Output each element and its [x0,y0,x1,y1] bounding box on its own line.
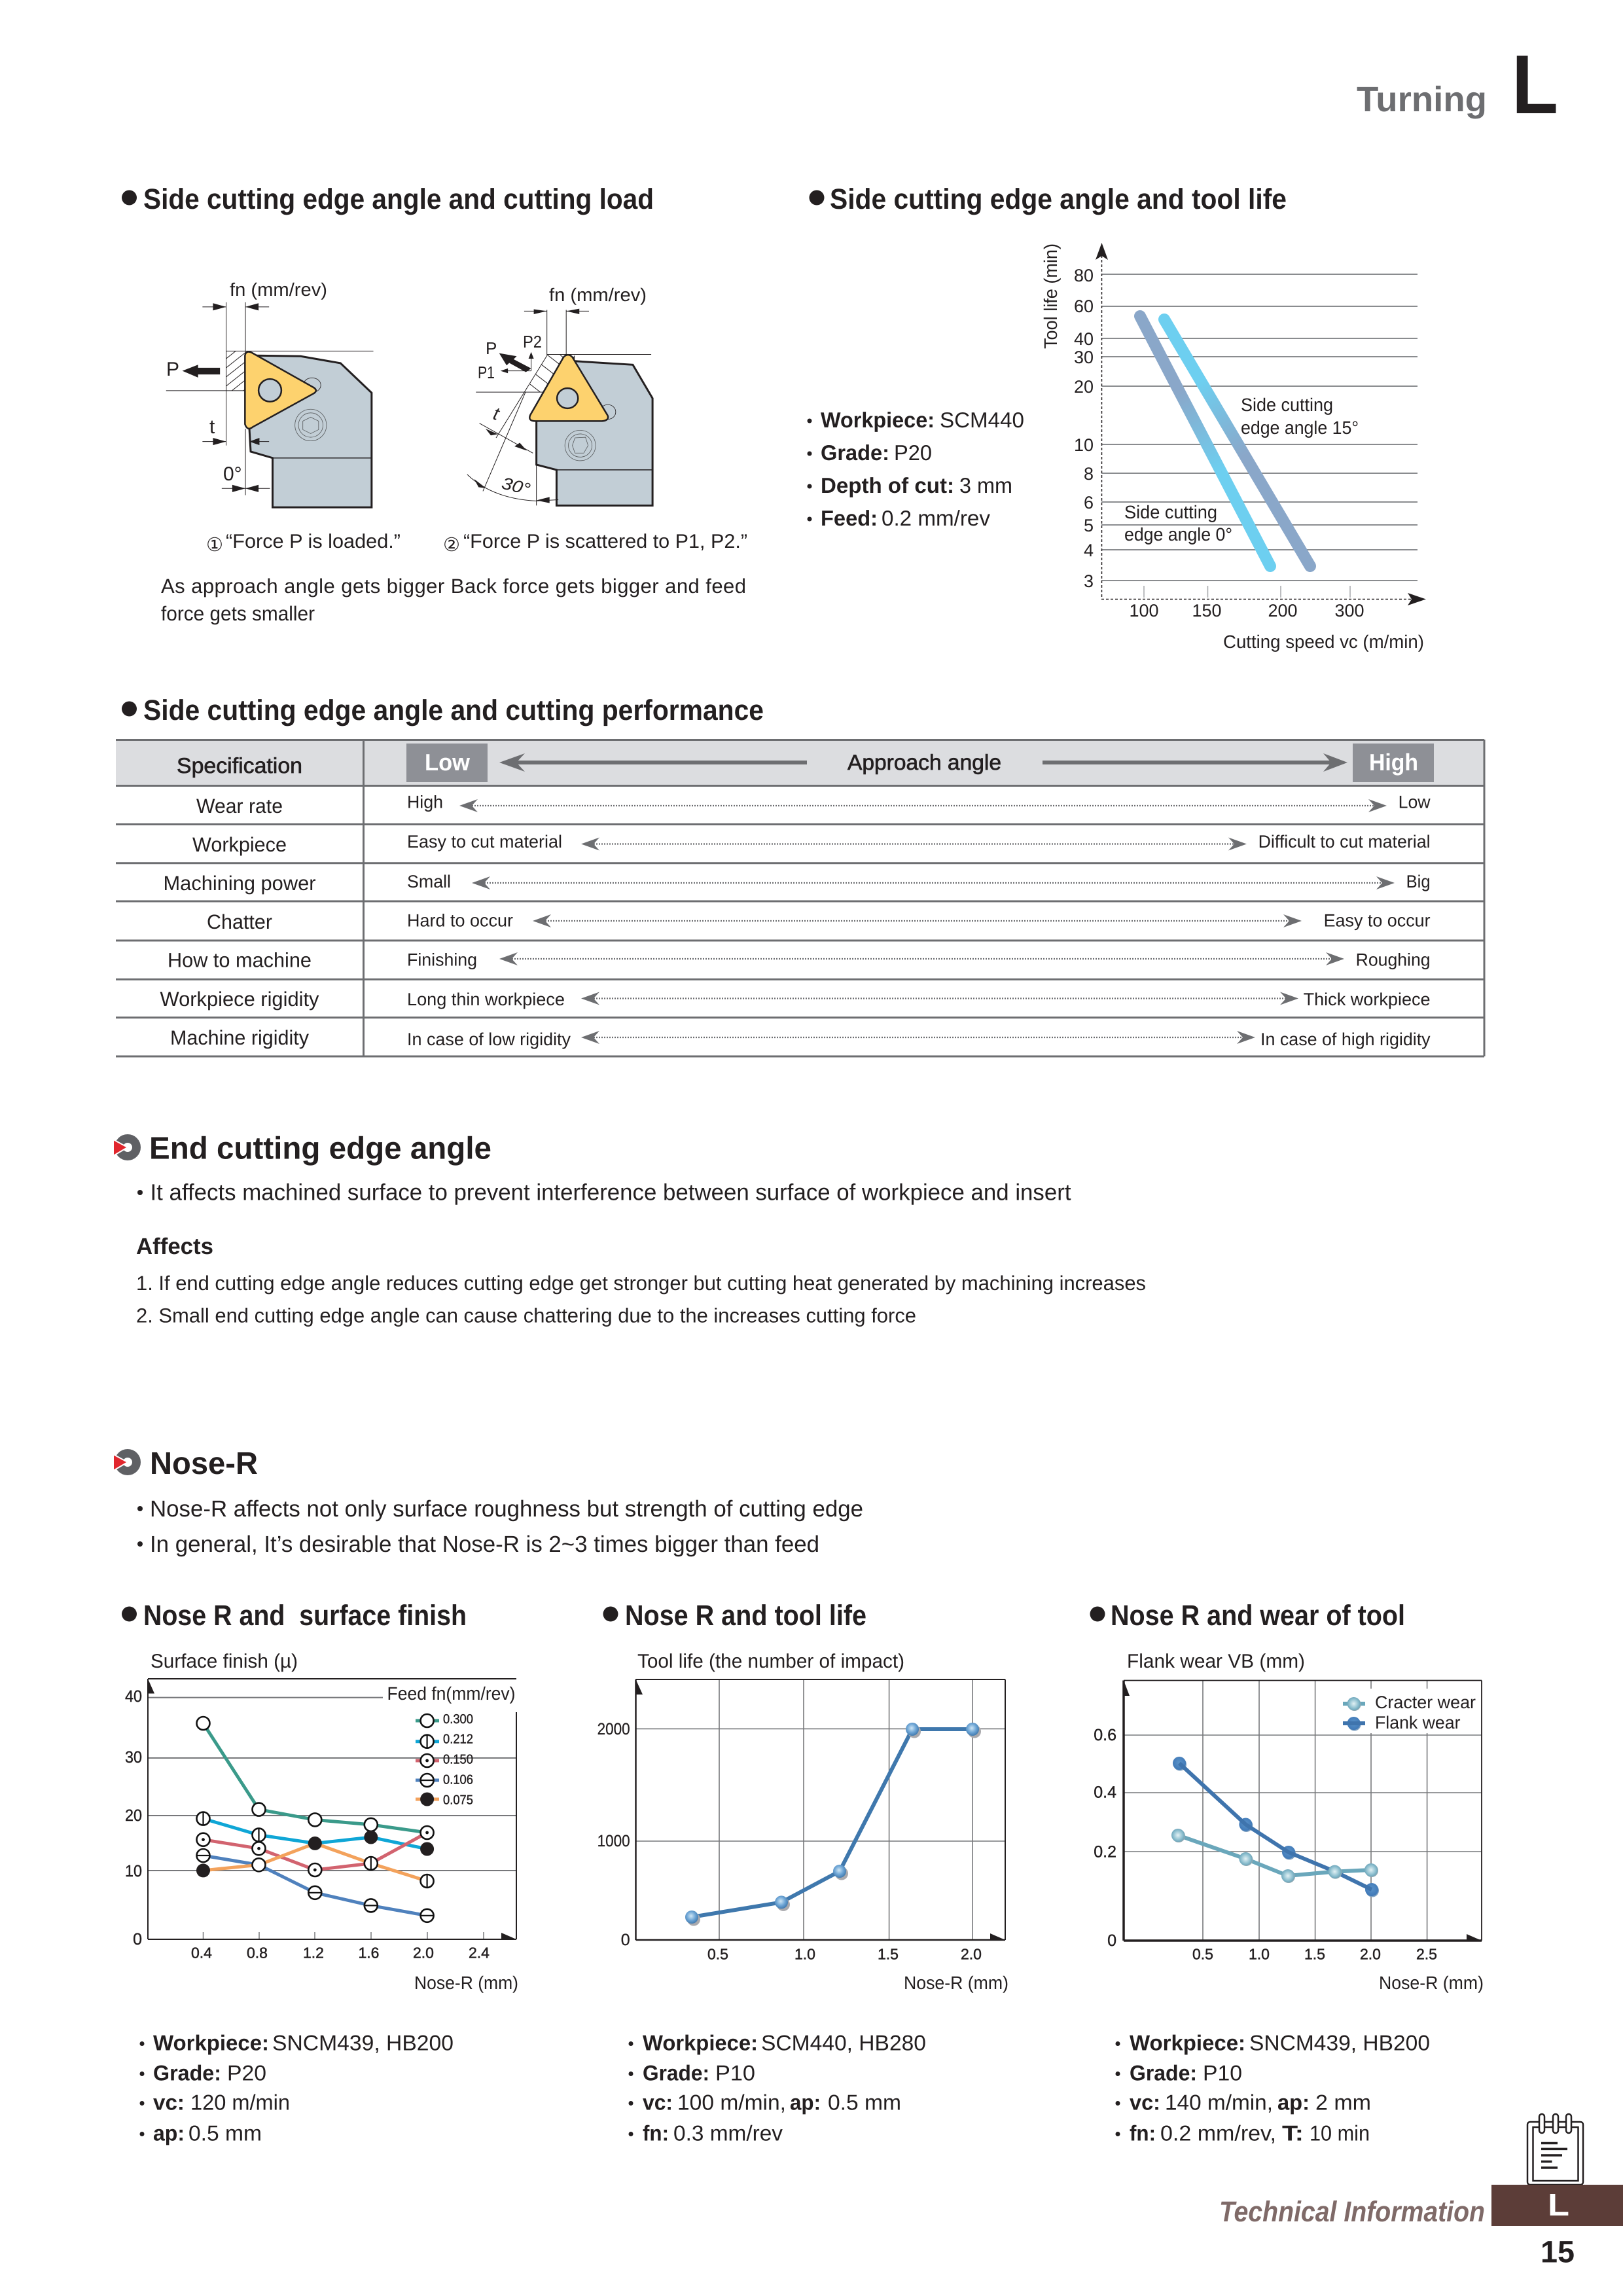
chart: tool life vs cutting speed [1041,243,1426,652]
conditions list: ap: [1277,2090,1310,2114]
label: P2: P2 [523,332,542,351]
label: P left: P [166,359,179,380]
header: low badge: Low [425,749,471,776]
y axis labels: 20 [125,1806,142,1825]
y axis labels: 40 [125,1687,142,1706]
text block: approach angle note: force gets smaller [161,602,315,625]
x axis labels: 0.5 [1192,1946,1213,1963]
conditions list: T: [1282,2121,1304,2145]
y axis labels: 0.2 [1094,1843,1116,1861]
conditions list: fn: [643,2121,669,2145]
conditions list: vc: [1130,2090,1160,2114]
y axis tick labels: 10 [1074,435,1094,455]
heading: Nose R and wear of tool [1111,1600,1405,1632]
x axis labels: 1.2 [303,1944,324,1961]
y axis tick labels: 6 [1084,493,1094,512]
label: t right: t [491,403,502,424]
y axis labels: 0 [621,1931,630,1949]
axis title: Tool life (the number of impact) [637,1651,904,1672]
y axis labels: 0.6 [1094,1726,1116,1744]
bullet text: In general, It’s desirable that Nose-R is 2~3 times bigger than feed [150,1532,819,1557]
row: machine rigidity: Machine rigidity [170,1026,309,1049]
conditions list: P10 [1203,2060,1242,2085]
conditions list: Workpiece: [153,2030,269,2055]
conditions list: ap: [790,2090,821,2114]
section tab [1491,2185,1623,2226]
x axis labels: 0.4 [191,1944,212,1961]
x axis tick labels [1129,601,1364,620]
conditions list [1115,2030,1430,2145]
label: fn (mm/rev) left: fn (mm/rev) [230,279,327,300]
y axis tick labels: 4 [1084,541,1094,560]
row: workpiece [192,832,1431,856]
y axis labels: 0.4 [1094,1783,1116,1801]
caption: force P is loaded: ① [206,535,223,556]
row: machine rigidity: In case of high rigidity [1260,1030,1431,1049]
conditions list: Depth of cut: [821,473,954,497]
row: workpiece rigidity: Workpiece rigidity [160,988,319,1011]
legend: Cracter wear [1375,1693,1476,1712]
conditions list: Grade: [643,2060,709,2085]
conditions list: 0.5 mm [188,2121,262,2145]
y axis labels: 30 [125,1748,142,1767]
conditions list: Feed: [821,506,878,530]
conditions list: ap: [153,2121,185,2145]
page number: 15 [1541,2234,1575,2269]
conditions list: 140 m/min, [1165,2090,1273,2114]
panel: nose R and tool life [597,1600,1008,2145]
x axis labels: 2.0 [961,1946,982,1963]
y axis labels: 2000 [597,1720,630,1738]
header: section name [1357,38,1558,132]
x axis labels: 2.4 [469,1944,490,1961]
x axis title: Nose-R (mm) [1379,1973,1484,1993]
footer [1219,2114,1623,2269]
conditions list: Grade: [821,440,889,465]
x axis labels: 1.0 [1249,1946,1270,1963]
legend: 0.150 [443,1753,473,1767]
row: machining power: Small [407,872,451,891]
heading: Side cutting edge angle and tool life [830,183,1287,215]
x axis tick labels: 300 [1334,601,1364,620]
subheading: affects: Affects [136,1234,213,1259]
heading: Nose R and surface finish [143,1600,467,1632]
x axis title: Cutting speed vc (m/min) [1223,632,1424,652]
row: chatter: Hard to occur [407,911,513,931]
y axis labels: 10 [125,1862,142,1880]
conditions list: Grade: [153,2060,221,2085]
text: technical information: Technical Information [1219,2196,1485,2228]
panel: nose R and surface finish [122,1600,518,2145]
x axis labels [1192,1946,1437,1963]
label: 0 degree: 0° [223,463,242,485]
series: cracter wear [1171,1829,1378,1883]
legend title [383,1683,518,1712]
x axis labels: 1.5 [1304,1946,1325,1963]
y axis labels: 1000 [597,1832,630,1850]
x axis title: Nose-R (mm) [414,1973,518,1993]
panel: side cutting edge angle and tool life [808,183,1426,652]
header: approach angle arrow left [499,753,807,772]
conditions list [140,2030,454,2145]
legend [1338,1689,1479,1733]
legend: 0.106 [443,1773,473,1787]
icon: section marker [113,1453,136,1471]
conditions list: SCM440 [940,408,1024,432]
row: workpiece: Easy to cut material [407,832,562,852]
section tab: L [1548,2188,1569,2223]
legend [416,1712,473,1807]
series: 0.212 [203,1819,427,1849]
line label 15 degree: Side cutting [1241,395,1333,415]
x axis tick labels: 100 [1129,601,1159,620]
series: 0.150 [203,1833,427,1870]
y axis tick labels: 3 [1084,571,1094,591]
row: workpiece: Difficult to cut material [1258,832,1431,852]
conditions list: P10 [715,2060,755,2085]
heading: Side cutting edge angle and cutting load [143,183,654,215]
bullet text [137,1496,863,1557]
label: 30 degree: 30° [500,473,532,499]
header: specification: Specification [177,753,302,778]
header: approach angle: Approach angle [847,750,1001,774]
conditions list: 0.2 mm/rev, [1160,2121,1276,2145]
y axis tick labels: 60 [1074,296,1094,316]
panel: end cutting edge angle [113,1132,1146,1327]
axis title: Flank wear VB (mm) [1127,1651,1305,1672]
x axis labels: 2.0 [413,1944,434,1961]
row: machining power: Big [1406,872,1431,891]
conditions list: 0.5 mm [828,2090,901,2114]
row: workpiece rigidity: Thick workpiece [1304,990,1431,1009]
conditions list: vc: [643,2090,673,2114]
label: P right: P [486,338,497,358]
y axis tick labels: 40 [1074,329,1094,349]
conditions list: Workpiece: [1130,2030,1245,2055]
conditions list: fn: [1130,2121,1156,2145]
icon: section marker [113,1139,136,1156]
y axis labels [1094,1726,1116,1950]
conditions list: Grade: [1130,2060,1197,2085]
y axis tick labels: 20 [1074,377,1094,397]
conditions list: SNCM439, HB200 [272,2030,454,2055]
panel: nose R and wear of tool [1090,1600,1484,2145]
row: chatter [207,910,1431,933]
conditions list: Workpiece: [643,2030,758,2055]
x axis labels: 1.0 [794,1946,815,1963]
y axis labels [597,1720,630,1949]
x axis labels: 2.5 [1416,1946,1437,1963]
conditions list: 2 mm [1315,2090,1371,2114]
x axis labels [191,1944,490,1961]
panel: nose-R [113,1446,863,1557]
row: machine rigidity [170,1026,1431,1049]
header: high badge [1353,744,1434,782]
list: affects [136,1272,1146,1327]
row: machining power [164,872,1431,895]
series: 0.106 [203,1856,427,1916]
conditions list: 10 min [1310,2121,1370,2145]
row: wear rate: Wear rate [196,795,283,817]
y axis labels: 0 [1107,1931,1116,1950]
series: 0.075 [203,1843,427,1881]
y axis labels: 0 [133,1930,142,1948]
panel: side cutting edge angle and cutting load [122,183,747,625]
conditions list: 100 m/min, [677,2090,786,2114]
text block: approach angle note [161,575,746,625]
axis title: Surface finish (µ) [151,1651,298,1672]
text block: approach angle note: As approach angle gets bigger Back force gets bigger and feed [161,575,746,598]
row: wear rate [196,792,1431,817]
row: how to machine [168,949,1431,971]
label: fn (mm/rev) right: fn (mm/rev) [549,285,647,305]
y axis tick labels: 8 [1084,464,1094,484]
x axis labels: 0.5 [707,1946,728,1963]
row: chatter: Chatter [207,910,272,933]
label: P1: P1 [478,363,495,382]
chart: wear of tool [1094,1681,1484,1993]
row: machine rigidity: In case of low rigidity [407,1030,571,1049]
list: affects: 2. Small end cutting edge angle can cause chattering due to the increases cutting force [136,1304,916,1327]
y axis tick labels: 5 [1084,516,1094,535]
icon: notebook [1527,2114,1583,2185]
x axis labels: 2.0 [1360,1946,1381,1963]
legend: 0.212 [443,1732,473,1747]
row: wear rate: High [407,792,443,812]
conditions list: vc: [153,2090,185,2114]
panel: side cutting edge angle and cutting load: “Force P is scattered to P1, P2.” [463,531,747,552]
row: how to machine: How to machine [168,949,312,971]
conditions list: 120 m/min [190,2090,290,2114]
legend: Flank wear [1375,1713,1461,1732]
y axis title: Tool life (min) [1041,243,1061,349]
list: affects: 1. If end cutting edge angle reduces cutting edge get stronger but cutting heat generated by machining increases [136,1272,1146,1295]
conditions list [808,408,1024,530]
row: workpiece: Workpiece [192,833,287,856]
chart: surface finish [125,1679,518,1993]
chart: tool life [597,1679,1008,1993]
header: approach angle arrow right [1043,753,1347,772]
row: workpiece rigidity: Long thin workpiece [407,990,565,1009]
y axis tick labels: 30 [1074,348,1094,367]
data markers [196,1717,434,1922]
bullet text: Nose-R affects not only surface roughness but strength of cutting edge [150,1496,863,1522]
y axis tick labels: 80 [1074,266,1094,285]
series: flank wear [1173,1757,1379,1897]
x axis labels [707,1946,982,1963]
panel: side cutting edge angle and cutting load: “Force P is loaded.” [226,531,401,552]
x axis labels: 0.8 [247,1944,268,1961]
x axis tick labels: 200 [1268,601,1298,620]
y axis tick labels [1074,266,1094,591]
line label 15 degree [1241,395,1359,438]
header: high badge: High [1369,749,1418,776]
heading: Side cutting edge angle and cutting performance [143,694,764,726]
heading: Nose R and tool life [625,1600,866,1632]
legend title: Feed fn(mm/rev) [387,1683,516,1704]
conditions list: P20 [227,2060,266,2085]
bullet text: It affects machined surface to prevent interference between surface of workpiece and insert [151,1180,1071,1206]
title: Nose-R [150,1446,258,1481]
conditions list [628,2030,926,2145]
x axis labels: 1.6 [359,1944,379,1961]
diagram: tool at 0 degree approach [166,302,374,507]
legend: 0.300 [443,1712,473,1727]
y axis labels [125,1687,142,1948]
line label 15 degree: edge angle 15° [1241,418,1359,438]
data series [685,1723,981,1926]
line label 0 degree: Side cutting [1124,502,1217,522]
line label 0 degree [1124,502,1232,545]
x axis tick labels: 150 [1192,601,1222,620]
header: low badge [406,744,488,782]
caption: force P is scattered: ② [443,535,460,556]
row: chatter: Easy to occur [1324,911,1431,931]
legend: 0.075 [443,1793,473,1807]
row: workpiece rigidity [160,988,1431,1011]
series: 0.300 [203,1723,427,1833]
x axis labels: 1.5 [878,1946,899,1963]
row: machining power: Machining power [164,872,315,895]
table [116,740,1484,1056]
conditions list: Workpiece: [821,408,935,432]
conditions list: 0.2 mm/rev [882,506,990,530]
conditions list: P20 [894,440,932,465]
row: how to machine: Roughing [1356,950,1431,970]
title: End cutting edge angle [149,1132,491,1166]
diagram: tool at 30 degree approach [467,309,652,505]
text: section letter L: L [1512,38,1558,132]
label: t left: t [209,416,215,438]
panel: side cutting edge angle and cutting performance [116,694,1484,1056]
text: Turning: Turning [1357,80,1487,119]
conditions list: 3 mm [959,473,1012,497]
row: how to machine: Finishing [407,950,477,970]
line label 0 degree: edge angle 0° [1124,524,1232,545]
conditions list: SCM440, HB280 [761,2030,926,2055]
conditions list: 0.3 mm/rev [673,2121,783,2145]
x axis title: Nose-R (mm) [904,1973,1008,1993]
row: wear rate: Low [1399,792,1431,812]
conditions list: SNCM439, HB200 [1249,2030,1430,2055]
